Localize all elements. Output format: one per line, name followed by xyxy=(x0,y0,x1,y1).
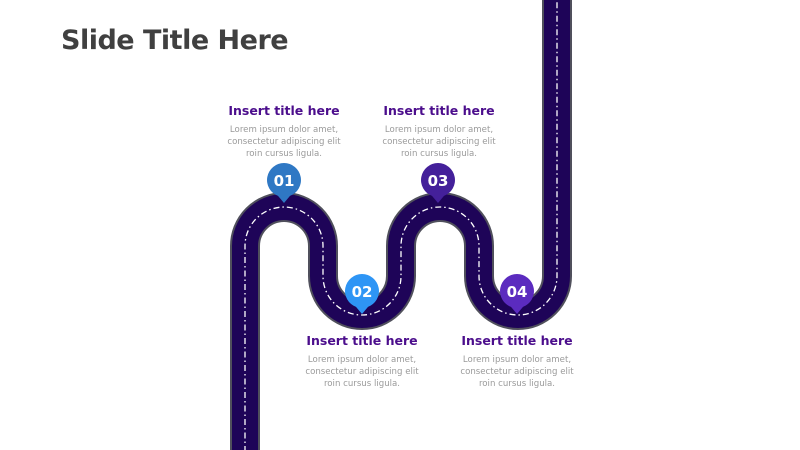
pin 01: 01 xyxy=(274,172,294,190)
text 02: consectetur adipiscing elit xyxy=(305,367,419,377)
text 02: Insert title here xyxy=(306,333,418,348)
text 03: Lorem ipsum dolor amet, xyxy=(385,125,493,135)
text 04 xyxy=(460,333,574,389)
text 03: Insert title here xyxy=(383,103,495,118)
title: Slide Title Here xyxy=(61,25,288,56)
text 03: roin cursus ligula. xyxy=(401,149,477,159)
text 03 xyxy=(382,103,496,159)
text 03: consectetur adipiscing elit xyxy=(382,137,496,147)
text 04: Insert title here xyxy=(461,333,573,348)
text 04: roin cursus ligula. xyxy=(479,379,555,389)
text 04: Lorem ipsum dolor amet, xyxy=(463,355,571,365)
text 01: Lorem ipsum dolor amet, xyxy=(230,125,338,135)
pin 03: 03 xyxy=(428,172,448,190)
text 02 xyxy=(305,333,419,389)
text 01: roin cursus ligula. xyxy=(246,149,322,159)
text 01: consectetur adipiscing elit xyxy=(227,137,341,147)
text 02: Lorem ipsum dolor amet, xyxy=(308,355,416,365)
pin 03 xyxy=(421,163,455,203)
pin 04 xyxy=(500,274,534,314)
pin 01 xyxy=(267,163,301,203)
text 01 xyxy=(227,103,341,159)
pin 02: 02 xyxy=(352,283,372,301)
pin 02 xyxy=(345,274,379,314)
text 01: Insert title here xyxy=(228,103,340,118)
pin 04: 04 xyxy=(507,283,527,301)
text 04: consectetur adipiscing elit xyxy=(460,367,574,377)
text 02: roin cursus ligula. xyxy=(324,379,400,389)
